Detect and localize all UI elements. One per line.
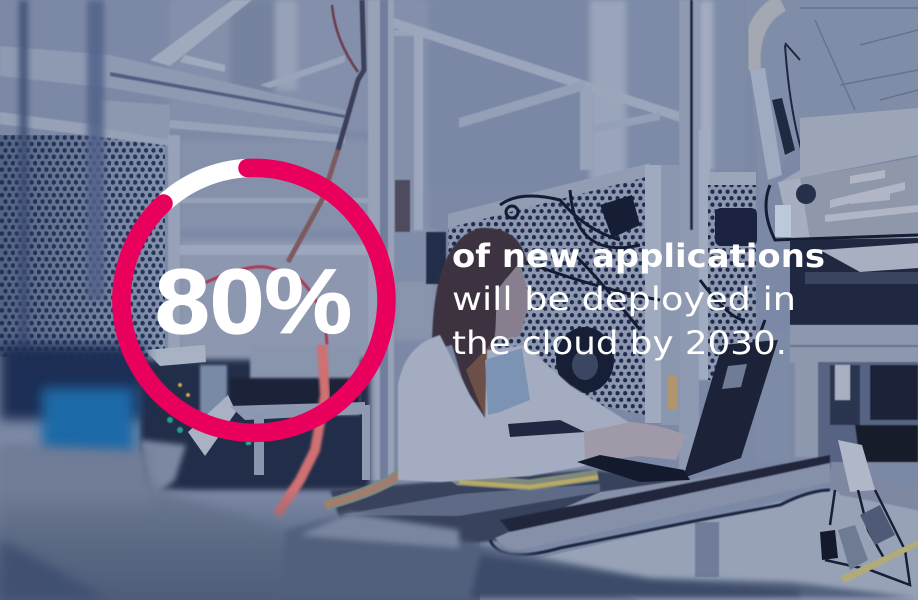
bottom-left blurred foreground: [0, 445, 480, 600]
arm shadow: [508, 420, 585, 437]
near foreground sheet: [280, 513, 918, 598]
bench dark area: [330, 458, 830, 545]
distant windows and pillars: [170, 0, 745, 360]
devices and wires on panels: [500, 190, 765, 400]
hanging cables: [200, 0, 364, 345]
hands: [584, 422, 686, 462]
coloured cable bundle: [325, 471, 600, 516]
metal rail and leg: [756, 325, 918, 462]
right machine: [745, 0, 918, 325]
frame beams top left: [0, 0, 710, 480]
blurred foreground poles: [19, 0, 104, 350]
shirt: [485, 348, 530, 415]
sweater: [398, 335, 630, 482]
statement text: will be deployed in: [452, 280, 796, 318]
statement text: of new applications: [452, 237, 825, 275]
floor right: [510, 490, 918, 600]
workbench shelf with electronics: [140, 345, 370, 500]
big percentage: 80%: [155, 251, 352, 353]
ring progress (pink): [121, 168, 386, 433]
statement text: the cloud by 2030.: [452, 324, 787, 362]
left perforated panel: [0, 135, 165, 357]
statement text: [452, 237, 825, 362]
progress ring: 80%: [121, 168, 386, 433]
blue barrel: [42, 388, 134, 466]
laptop: [577, 340, 778, 482]
long bench beam: [490, 455, 918, 577]
face: [495, 262, 530, 340]
orange and pink cable bundle: [277, 345, 325, 515]
dark blurred mass above the barrel: [0, 345, 145, 420]
hair: [432, 228, 527, 420]
hanging wire harness: [820, 440, 918, 585]
woman: [398, 228, 686, 482]
ring remainder (white): [164, 168, 248, 204]
right perforated panels: [448, 163, 756, 425]
